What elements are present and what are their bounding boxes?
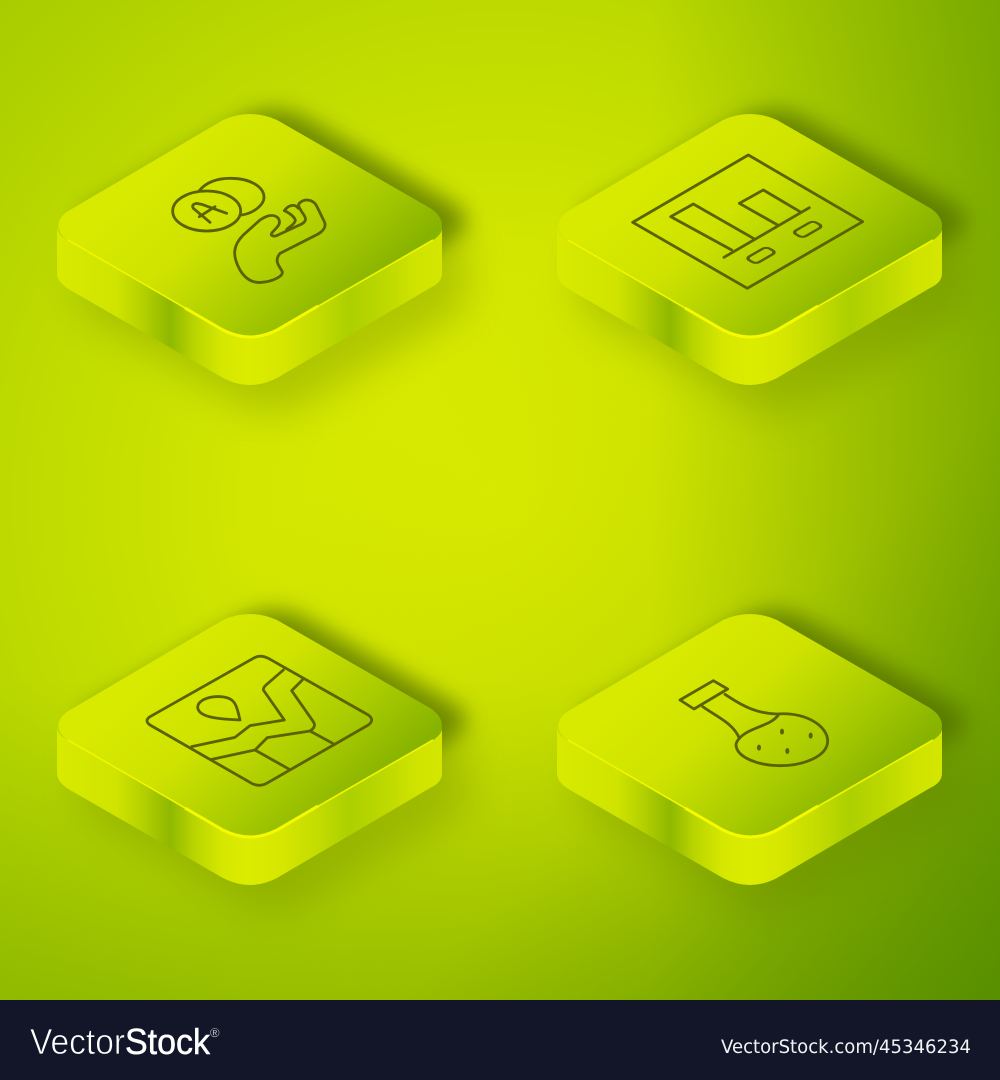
icon: chemistry flask: [680, 681, 828, 766]
footer logo: ®: [210, 1025, 220, 1040]
panel: isometric tile with bar chart report icon: [557, 110, 967, 413]
footer logo: Vector: [30, 1021, 125, 1062]
icon: map with location pin: [147, 656, 372, 785]
panel: isometric tile with map and pin icon: [57, 610, 467, 913]
footer logo: [30, 1021, 220, 1062]
panel: isometric tile with flask icon: [557, 610, 967, 913]
footer url: VectorStock.com/45346234: [721, 1036, 971, 1058]
icon: coin A and hand: [173, 178, 325, 282]
footer logo: Stock: [125, 1021, 211, 1062]
icon: bar chart sheet: [633, 155, 863, 288]
footer bar: [0, 1000, 1000, 1080]
panel: isometric tile with hand and coins icon: [57, 110, 467, 413]
